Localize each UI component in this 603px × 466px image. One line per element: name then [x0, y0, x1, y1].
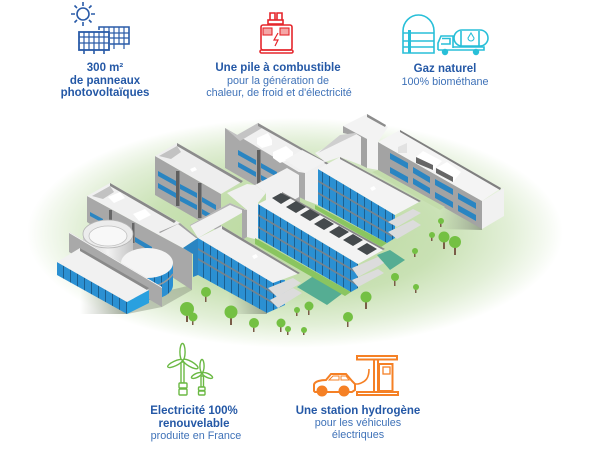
lawns between buildings — [255, 170, 445, 296]
heading: une pile à combustible — [206, 62, 352, 99]
icon: car and hydrogen station — [314, 356, 398, 396]
heading: 300 m² de panneaux photovoltaïques: photovoltaïques — [61, 87, 149, 99]
icon: sun and solar panels — [71, 2, 129, 54]
round building glazed — [121, 248, 173, 300]
heading: 300 m² de panneaux photovoltaïques: de panneaux — [70, 75, 141, 87]
block: solar panels — [61, 2, 149, 99]
block: renewable electricity — [150, 344, 241, 442]
icon: biomethane dome and tanker truck — [403, 15, 488, 54]
heading: une station hydrogène: pour les véhicules — [315, 417, 402, 429]
heading: électricité 100% renouvelable: produite en France — [151, 430, 241, 442]
long gray wall — [69, 232, 162, 307]
heading: gaz naturel: 100% biométhane — [401, 76, 489, 88]
heading: une station hydrogène: Une station hydrogène — [296, 405, 420, 417]
block: natural gas — [401, 15, 489, 88]
building D: right blue block — [318, 157, 421, 243]
green ground ellipse — [27, 118, 563, 348]
heading: électricité 100% renouvelable — [150, 405, 241, 442]
building B: upper left wing — [225, 123, 335, 211]
shadows — [80, 195, 482, 314]
heading: une station hydrogène: électriques — [332, 429, 385, 441]
building E: upper right wing — [378, 130, 504, 229]
building H: front blue block — [198, 226, 302, 313]
heading: une pile à combustible: Une pile à combustible — [215, 62, 341, 74]
central corridors — [190, 150, 325, 240]
heading: gaz naturel — [401, 63, 489, 88]
building F: left wing — [87, 183, 198, 290]
heading: gaz naturel: Gaz naturel — [414, 63, 476, 75]
solar panels on roof — [272, 193, 377, 255]
trees — [180, 218, 461, 335]
heading: une pile à combustible: pour la génération de — [227, 75, 329, 87]
heading: une station hydrogène — [296, 405, 420, 441]
heading: 300 m² de panneaux photovoltaïques — [61, 62, 149, 99]
icon: wind turbines — [167, 344, 213, 395]
heading: 300 m² de panneaux photovoltaïques: 300 m² — [87, 62, 123, 74]
icon: fuel cell — [260, 13, 293, 53]
tower and back corridor — [315, 114, 388, 170]
heading: une pile à combustible: chaleur, de froid et d'électricité — [206, 87, 352, 99]
block: hydrogen station — [296, 356, 420, 441]
campus illustration — [57, 114, 504, 335]
heading: électricité 100% renouvelable: renouvelable — [159, 418, 229, 430]
block: fuel cell — [206, 13, 352, 99]
building G: front left — [57, 248, 149, 314]
pools — [297, 250, 405, 305]
round building with terrace — [83, 220, 133, 264]
building C: centre blue block — [258, 192, 385, 292]
heading: électricité 100% renouvelable: Electricité 100% — [150, 405, 238, 417]
building A: upper left block — [155, 143, 243, 233]
